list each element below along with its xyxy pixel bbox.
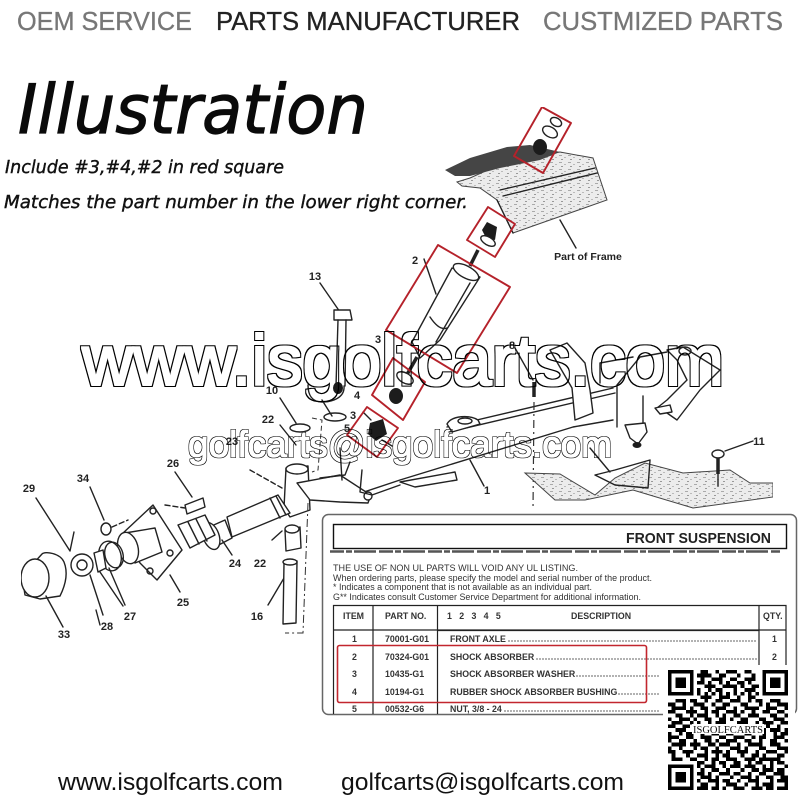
- callout numbers: 23: [226, 436, 238, 448]
- callout numbers: 10: [266, 385, 278, 397]
- end cap 33: [21, 553, 66, 627]
- table row 2: 2: [352, 652, 357, 662]
- callout numbers: [23, 255, 765, 641]
- ordering notes: THE USE OF NON UL PARTS WILL VOID ANY UL LISTING.: [333, 563, 578, 573]
- callout numbers: 26: [167, 458, 179, 470]
- callout numbers: 2: [412, 255, 418, 267]
- callout numbers: 5: [344, 423, 350, 435]
- lower bushing set: [363, 369, 415, 446]
- note: included parts: Include #3,#4,#2 in red square: [5, 157, 284, 178]
- bolt 10 washer and small bracket: [280, 398, 400, 495]
- callout numbers: 29: [23, 483, 35, 495]
- table row 1: 70001-G01: [385, 634, 429, 644]
- table header row: 1 2 3 4 5: [447, 611, 501, 621]
- table row 2: SHOCK ABSORBER: [450, 652, 535, 662]
- callout numbers: 28: [101, 621, 113, 633]
- table row 2: [352, 652, 777, 662]
- callout numbers: 8: [509, 340, 515, 352]
- upper mount hardware: [533, 116, 563, 155]
- callout numbers: 34: [77, 473, 90, 485]
- long bolt 13: [308, 283, 352, 421]
- header: OEM service: OEM SERVICE: [17, 6, 192, 36]
- callout numbers: 4: [354, 390, 361, 402]
- exploded suspension diagram: [21, 107, 773, 641]
- table row 2: 2: [772, 652, 777, 662]
- table row 5: [352, 704, 660, 714]
- panel title: FRONT SUSPENSION: [626, 530, 771, 547]
- lower plate with bolt 11: [525, 441, 773, 508]
- header: customized parts: CUSTMIZED PARTS: [543, 6, 783, 36]
- table row 1: 1: [352, 634, 357, 644]
- panel title: [334, 524, 786, 548]
- callout numbers: 33: [58, 629, 70, 641]
- table row 4: 4: [352, 687, 357, 697]
- note: part number match: Matches the part number in the lower right corner.: [4, 192, 468, 213]
- table row 5: 00532-G6: [385, 704, 424, 714]
- watermark: website: www.isgolfcarts.com: [81, 322, 724, 401]
- ordering notes: When ordering parts, please specify the model and serial number of the product.: [333, 573, 652, 583]
- header: parts manufacturer: PARTS MANUFACTURER: [216, 6, 520, 36]
- callout numbers: 27: [124, 611, 136, 623]
- callout numbers: 3: [350, 410, 356, 422]
- footer: email: golfcarts@isgolfcarts.com: [341, 769, 624, 796]
- callout numbers: 1: [484, 485, 490, 497]
- table header row: PART NO.: [385, 611, 426, 621]
- callout numbers: 24: [229, 558, 242, 570]
- table header row: DESCRIPTION: [571, 611, 631, 621]
- shock absorber: [405, 259, 481, 378]
- table row 4: RUBBER SHOCK ABSORBER BUSHING: [450, 687, 617, 697]
- callout numbers: 11: [753, 436, 765, 448]
- table row 4: 10194-G1: [385, 687, 424, 697]
- watermark: email: golfcarts@isgolfcarts.com: [188, 424, 612, 465]
- parts table: [334, 605, 786, 714]
- QR code: [663, 665, 795, 797]
- callout numbers: 13: [309, 271, 321, 283]
- table header row: QTY.: [763, 611, 783, 621]
- header tagline: [17, 6, 783, 36]
- table row 3: SHOCK ABSORBER WASHER: [450, 669, 576, 679]
- part of frame: Part of Frame: [554, 251, 622, 263]
- callout numbers: 3: [375, 334, 381, 346]
- parts list panel: [322, 514, 796, 714]
- table row 4: [352, 687, 660, 697]
- ordering notes: G** Indicates consult Customer Service Department for additional information.: [333, 592, 641, 602]
- king pin bushing and pin: [283, 503, 308, 633]
- callout numbers: 22: [254, 558, 266, 570]
- ordering notes: [333, 563, 652, 602]
- table row 1: FRONT AXLE: [450, 634, 506, 644]
- title: Illustration: [18, 71, 368, 150]
- table row 3: 3: [352, 669, 357, 679]
- table row 1: 1: [772, 634, 777, 644]
- table row 3: 10435-G1: [385, 669, 424, 679]
- callout numbers: 22: [262, 414, 274, 426]
- table row 2: 70324-G01: [385, 652, 429, 662]
- table row 5: NUT, 3/8 - 24: [450, 704, 502, 714]
- table header row: ITEM: [343, 611, 364, 621]
- ordering notes: * Indicates a component that is not available as an individual part.: [333, 582, 592, 592]
- spindle and knuckle arm: [36, 464, 372, 625]
- QR label: ISGOLFCARTS: [693, 725, 763, 736]
- red highlight on rows 2-4: [338, 646, 646, 702]
- upper bushing: [470, 222, 497, 266]
- part of frame: [445, 145, 622, 263]
- right steering knuckle: [600, 347, 720, 448]
- table row 3: [352, 669, 660, 679]
- front axle beam: [355, 343, 615, 510]
- table header row: [343, 611, 783, 621]
- callout numbers: 16: [251, 611, 263, 623]
- table row 5: 5: [352, 704, 357, 714]
- red highlight boxes: [347, 107, 571, 457]
- callout numbers: 25: [177, 597, 189, 609]
- table row 1: [352, 634, 777, 644]
- footer: website: www.isgolfcarts.com: [57, 769, 283, 796]
